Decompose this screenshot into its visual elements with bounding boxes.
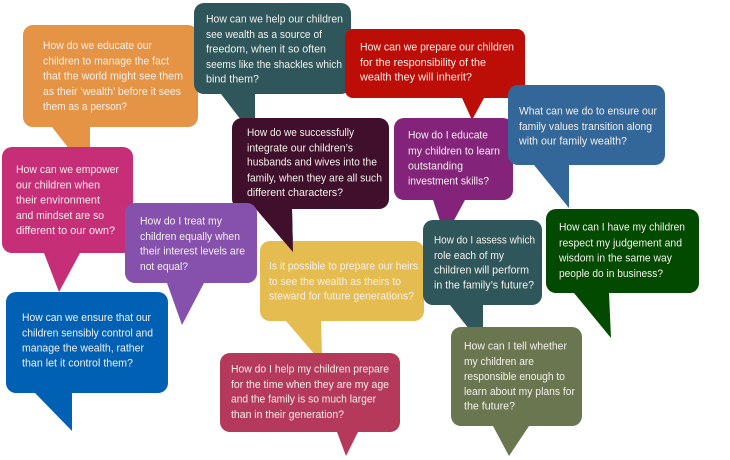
orange bubble text: as their ‘wealth’ before it sees	[43, 86, 181, 98]
bubble: olive, responsible enough	[451, 327, 582, 456]
dark teal bubble shape	[423, 220, 542, 329]
magenta bubble text	[408, 130, 500, 187]
crimson bubble text: and the family is so much larger	[231, 394, 376, 406]
steel blue bubble text: What can we do to ensure our	[519, 106, 657, 118]
red bubble text: How can we prepare our children	[360, 42, 514, 54]
bubble: magenta, investment skills	[394, 118, 513, 224]
olive bubble text	[464, 341, 575, 412]
green bubble text: How can I have my children	[559, 221, 685, 233]
blue bubble text: children sensibly control and	[22, 328, 153, 340]
pink bubble text	[16, 164, 119, 237]
violet bubble text: How do I treat my	[140, 216, 223, 228]
green bubble text: respect my judgement and	[559, 237, 682, 249]
green bubble text: people do in business?	[559, 268, 663, 280]
red bubble text	[359, 42, 514, 84]
olive bubble text: the future?	[464, 400, 515, 412]
teal bubble text: bind them?	[206, 74, 259, 86]
pink bubble text: our children when	[16, 180, 100, 192]
dark teal bubble text: role each of my	[434, 250, 505, 262]
yellow bubble text: steward for future generations?	[269, 291, 414, 303]
plum bubble text: family, when they are all such	[247, 172, 382, 184]
dark teal bubble text: children will perform	[434, 265, 529, 277]
magenta bubble shape	[394, 118, 513, 224]
green bubble text: wisdom in the same way	[558, 253, 673, 265]
violet bubble text: their interest levels are	[140, 246, 245, 258]
teal bubble text: see wealth as a source of	[206, 29, 322, 41]
blue bubble text: manage the wealth, rather	[22, 342, 144, 354]
crimson bubble shape	[220, 353, 400, 456]
olive bubble text: my children are	[464, 356, 534, 368]
crimson bubble text	[231, 364, 389, 421]
magenta bubble text: How do I educate	[408, 130, 488, 142]
pink bubble text: and mindset are so	[16, 210, 104, 222]
plum bubble text: different characters?	[247, 187, 343, 199]
plum bubble text: integrate our children’s	[247, 143, 353, 155]
steel blue bubble text: family values transition along	[519, 121, 652, 133]
violet bubble shape	[125, 203, 257, 325]
orange bubble text: How do we educate our	[43, 40, 152, 52]
plum bubble text: How do we successfully	[247, 127, 355, 139]
bubble: teal, assess roles	[423, 220, 542, 329]
bubble: plum, husbands and wives	[232, 118, 389, 252]
violet bubble text	[140, 216, 245, 273]
orange bubble text: them as a person?	[43, 101, 127, 113]
green bubble text	[558, 221, 685, 280]
olive bubble text: learn about my plans for	[464, 386, 575, 398]
bubble: red, responsibility	[345, 29, 525, 120]
yellow bubble shape	[260, 241, 424, 356]
olive bubble text: How can I tell whether	[464, 341, 567, 353]
teal bubble text: How can we help our children	[206, 14, 343, 26]
dark teal bubble text: How do I assess which	[434, 235, 535, 247]
blue bubble text	[22, 312, 153, 370]
bubble: blue, family values	[508, 85, 665, 208]
magenta bubble text: my children to learn	[408, 145, 500, 157]
steel blue bubble text	[518, 106, 657, 148]
dark teal bubble text	[434, 235, 535, 292]
yellow bubble text: to see the wealth as theirs to	[269, 276, 401, 288]
blue bubble text: than let it control them?	[22, 358, 133, 370]
steel blue bubble text: with our family wealth?	[518, 136, 627, 148]
pink bubble shape	[2, 147, 133, 292]
bubble: crimson, family larger	[220, 353, 400, 456]
plum bubble text: husbands and wives into the	[247, 157, 377, 169]
violet bubble text: children equally when	[140, 231, 240, 243]
bubble: green, respect judgement	[546, 209, 699, 338]
green bubble shape	[546, 209, 699, 338]
red bubble text: for the responsibility of the	[360, 57, 486, 69]
teal bubble text	[206, 14, 343, 86]
teal bubble text: freedom, when it so often	[206, 44, 326, 56]
plum tail tip over yellow bubble	[256, 209, 293, 252]
blue bubble shape	[6, 292, 168, 431]
magenta bubble text: outstanding	[408, 160, 463, 172]
steel blue bubble shape	[508, 85, 665, 208]
bubble: blue, sensibly control wealth	[6, 292, 168, 431]
olive bubble shape	[451, 327, 582, 456]
teal bubble shape	[194, 3, 351, 120]
blue bubble text: How can we ensure that our	[22, 312, 151, 324]
red bubble text: wealth they will inherit?	[359, 72, 472, 84]
plum bubble text	[247, 127, 382, 199]
red bubble shape	[345, 29, 525, 120]
violet bubble text: not equal?	[140, 261, 188, 273]
bubble: yellow, steward	[260, 241, 424, 356]
crimson bubble text: How do I help my children prepare	[231, 364, 389, 376]
orange bubble shape	[23, 25, 198, 150]
teal bubble text: seems like the shackles which	[206, 59, 342, 71]
bubble: orange, educate children	[23, 25, 198, 150]
bubble: pink, empower children	[2, 147, 133, 292]
orange bubble text	[43, 40, 183, 113]
orange bubble text: that the world might see them	[43, 70, 183, 82]
crimson bubble text: for the time when they are my age	[231, 379, 389, 391]
pink bubble text: their environment	[16, 195, 100, 207]
magenta bubble text: investment skills?	[408, 175, 489, 187]
bubble: violet, treat equally	[125, 203, 257, 325]
crimson bubble text: than in their generation?	[231, 409, 344, 421]
bubble: teal, wealth as freedom	[194, 3, 351, 120]
pink bubble text: different to our own?	[16, 225, 115, 237]
plum bubble shape	[232, 118, 389, 252]
pink bubble text: How can we empower	[16, 164, 119, 176]
dark teal bubble text: in the family’s future?	[434, 280, 534, 292]
olive bubble text: responsible enough to	[464, 371, 565, 383]
yellow bubble text	[269, 261, 418, 303]
orange bubble text: children to manage the fact	[43, 55, 169, 67]
yellow bubble text: Is it possible to prepare our heirs	[269, 261, 418, 273]
